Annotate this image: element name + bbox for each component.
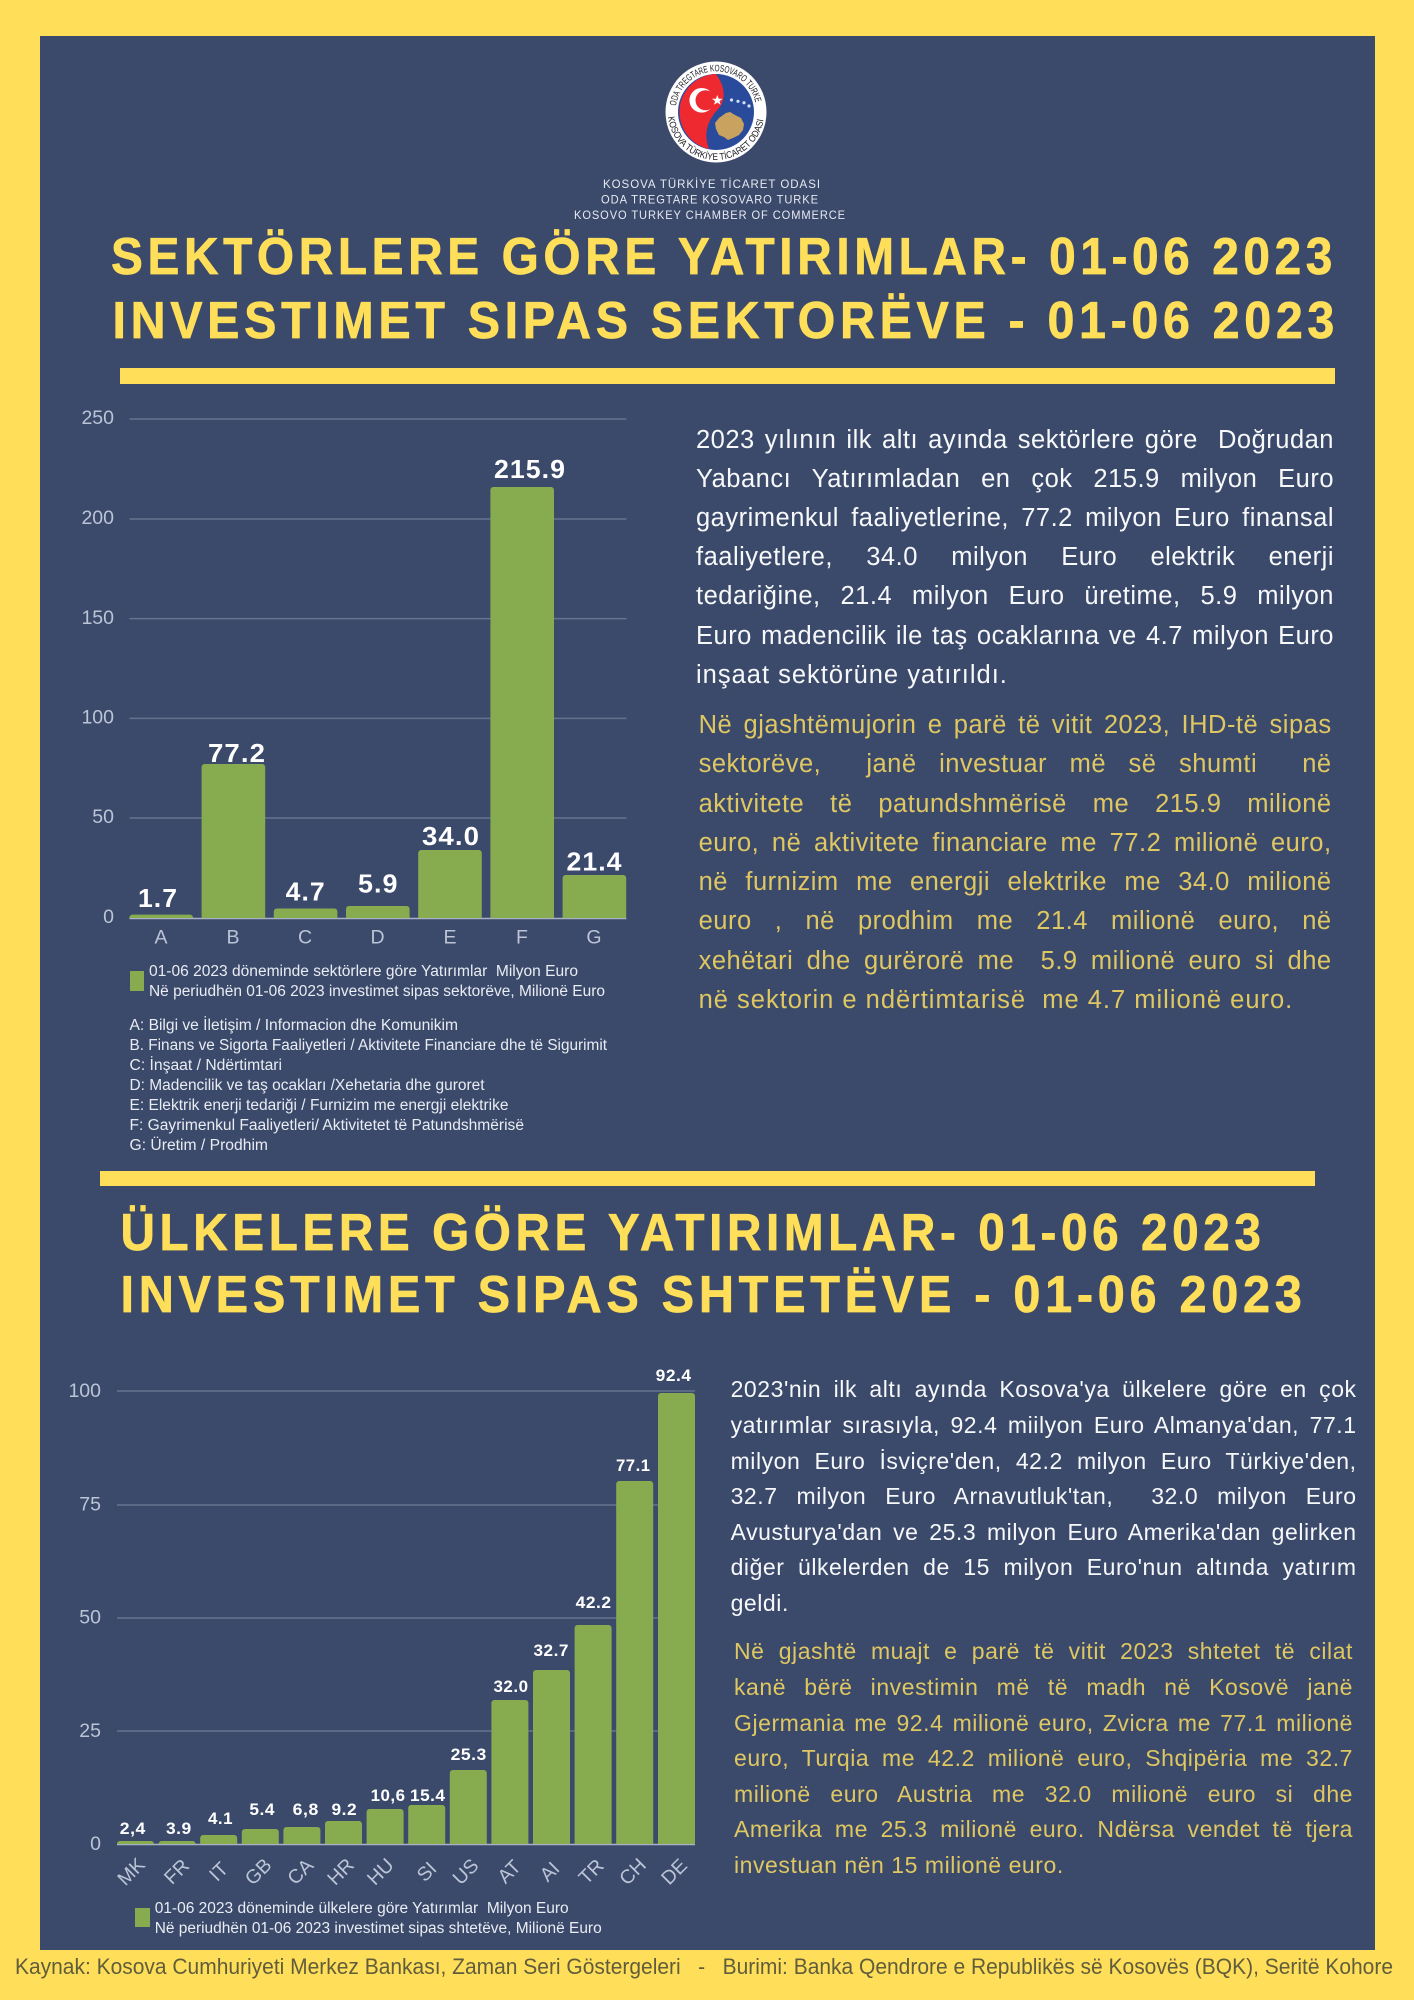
text block: sector analysis in Albanian: aktivitete të patundshmërisë me 215.9 milionë xyxy=(699,790,1332,818)
value labels: 21.4 xyxy=(566,847,622,877)
value labels: 215.9 xyxy=(494,454,566,484)
value labels: 42.2 xyxy=(576,1593,612,1612)
country labels rotated: CH xyxy=(615,1854,651,1890)
text block: country analysis in Albanian xyxy=(734,1638,1353,1878)
text block: country analysis in Turkish xyxy=(730,1376,1357,1616)
sector key list: F: Gayrimenkul Faaliyetleri/ Aktivitetet të Patundshmërisë xyxy=(130,1117,524,1134)
bars xyxy=(129,487,626,927)
value labels: 25.3 xyxy=(451,1745,487,1764)
title: investments by sector: SEKTÖRLERE GÖRE YATIRIMLAR- 01-06 2023 xyxy=(111,228,1337,286)
country labels rotated: US xyxy=(449,1855,483,1889)
y axis labels: 0 xyxy=(90,1833,101,1855)
legend: sector chart xyxy=(130,963,605,1000)
text block: sector analysis in Albanian: sektorëve, janë investuar më së shumti në xyxy=(699,750,1332,778)
sector key list: C: İnşaat / Ndërtimtari xyxy=(130,1056,282,1074)
value labels: 92.4 xyxy=(656,1366,692,1385)
category labels: B xyxy=(226,926,240,948)
country labels rotated: HU xyxy=(363,1854,398,1890)
value labels: 3.9 xyxy=(166,1819,192,1838)
text block: country analysis in Albanian: Në gjashtë muajt e parë të vitit 2023 shtetet të cilat xyxy=(734,1638,1353,1664)
country labels rotated: IT xyxy=(205,1858,233,1886)
sector key list: A: Bilgi ve İletişim / Informacion dhe Komunikim xyxy=(130,1016,458,1034)
y axis labels: 100 xyxy=(68,1380,101,1402)
value labels xyxy=(138,454,622,913)
country labels rotated: TR xyxy=(575,1855,609,1889)
value labels: 34.0 xyxy=(422,821,480,851)
bars xyxy=(117,1393,695,1853)
logo: chamber of commerce seal: KOSOVA TÜRKİYE TİCARET ODASI xyxy=(668,116,764,160)
organisation name in three languages: KOSOVO TURKEY CHAMBER OF COMMERCE xyxy=(574,208,846,222)
logo: chamber of commerce seal xyxy=(666,62,766,162)
text block: sector analysis in Albanian: xehëtari dhe gurërorë me 5.9 milionë euro si dhe xyxy=(699,947,1332,975)
y axis labels: 100 xyxy=(81,706,114,728)
y axis labels: 50 xyxy=(79,1606,101,1628)
text block: country analysis in Turkish: yatırımlar sırasıyla, 92.4 miilyon Euro Almanya'dan, 77.1 xyxy=(731,1412,1357,1438)
legend: sector chart: Në periudhën 01-06 2023 investimet sipas sektorëve, Milionë Euro xyxy=(149,983,605,1000)
title: investments by country: ÜLKELERE GÖRE YATIRIMLAR- 01-06 2023 xyxy=(120,1204,1266,1262)
organisation name in three languages xyxy=(574,177,846,222)
country labels rotated: GB xyxy=(241,1854,276,1890)
text block: country analysis in Albanian: milionë euro Austria me 32.0 milionë euro si dhe xyxy=(734,1781,1353,1807)
sector key list: G: Üretim / Prodhim xyxy=(130,1136,268,1154)
y axis labels: 150 xyxy=(81,607,114,629)
divider bar: middle section xyxy=(100,1171,1315,1186)
title: investments by country xyxy=(120,1204,1306,1324)
title: investments by sector xyxy=(111,228,1339,350)
y axis labels: 25 xyxy=(79,1720,101,1742)
text block: sector analysis in Albanian: në furnizim me energji elektrike me 34.0 milionë xyxy=(699,868,1332,896)
text block: sector analysis in Turkish: inşaat sektörüne yatırıldı. xyxy=(696,661,1008,689)
value labels: 6,8 xyxy=(293,1800,319,1819)
text block: sector analysis in Turkish: 2023 yılının ilk altı ayında sektörlere göre Doğrudan xyxy=(696,426,1334,454)
legend: sector chart: 01-06 2023 döneminde sektörlere göre Yatırımlar Milyon Euro xyxy=(149,963,578,980)
sector key list: B. Finans ve Sigorta Faaliyetleri / Aktivitete Financiare dhe të Sigurimit xyxy=(130,1037,608,1054)
text block: country analysis in Albanian: kanë bërë investimin më të madh në Kosovë janë xyxy=(734,1674,1353,1700)
text block: sector analysis in Turkish: Euro madencilik ile taş ocaklarına ve 4.7 milyon Euro xyxy=(696,622,1334,650)
value labels: 77.2 xyxy=(208,738,266,768)
text block: country analysis in Turkish: geldi. xyxy=(731,1590,789,1616)
value labels: 5.4 xyxy=(249,1800,275,1819)
country labels rotated: FR xyxy=(160,1855,194,1889)
value labels: 4.7 xyxy=(286,877,326,907)
sector key list: E: Elektrik enerji tedariği / Furnizim me energji elektrike xyxy=(130,1097,508,1114)
value labels: 15.4 xyxy=(410,1786,446,1805)
text block: country analysis in Turkish: Avusturya'dan ve 25.3 milyon Euro Amerika'dan gelirken xyxy=(731,1519,1357,1545)
y axis labels xyxy=(81,407,114,928)
bar chart: investments by country xyxy=(68,1366,695,1890)
text block: sector analysis in Albanian: euro , në prodhim me 21.4 milionë euro, në xyxy=(699,907,1332,935)
y axis labels: 50 xyxy=(92,806,114,828)
legend: country chart: Në periudhën 01-06 2023 investimet sipas shtetëve, Milionë Euro xyxy=(155,1920,602,1937)
value labels: 1.7 xyxy=(138,883,178,913)
text block: country analysis in Albanian: investuan nën 15 milionë euro. xyxy=(734,1852,1064,1878)
text block: sector analysis in Turkish: gayrimenkul faaliyetlerine, 77.2 milyon Euro finansal xyxy=(696,504,1334,532)
text block: sector analysis in Turkish: tedariğine, 21.4 milyon Euro üretime, 5.9 milyon xyxy=(696,582,1334,610)
divider bar: top section xyxy=(120,368,1335,384)
value labels: 5.9 xyxy=(358,869,398,899)
country labels rotated: AI xyxy=(536,1858,564,1886)
value labels: 10,6 xyxy=(371,1786,406,1805)
country labels rotated: CA xyxy=(283,1855,318,1889)
y axis labels: 200 xyxy=(81,507,114,529)
value labels: 32.7 xyxy=(534,1641,569,1660)
country labels rotated: DE xyxy=(657,1855,692,1889)
organisation name in three languages: KOSOVA TÜRKİYE TİCARET ODASI xyxy=(603,177,821,191)
bar chart: investments by sector xyxy=(81,407,626,948)
title: investments by country: INVESTIMET SIPAS SHTETËVE - 01-06 2023 xyxy=(120,1266,1306,1324)
country labels rotated: MK xyxy=(113,1854,150,1890)
country labels rotated: AT xyxy=(493,1856,526,1888)
title: investments by sector: INVESTIMET SIPAS SEKTORËVE - 01-06 2023 xyxy=(112,292,1339,350)
text block: country analysis in Turkish: milyon Euro İsviçre'den, 42.2 milyon Euro Türkiye'den, xyxy=(731,1448,1357,1474)
text block: country analysis in Turkish: 2023'nin ilk altı ayında Kosova'ya ülkelere göre en çok xyxy=(731,1376,1357,1402)
sector key list: D: Madencilik ve taş ocakları /Xehetaria dhe guroret xyxy=(130,1077,485,1094)
category labels: F xyxy=(516,926,528,948)
value labels: 9.2 xyxy=(332,1800,357,1819)
text block: sector analysis in Albanian: në sektorin e ndërtimtarisë me 4.7 milionë euro. xyxy=(699,986,1293,1014)
logo: chamber of commerce seal: ODA TREGTARE KOSOVARO TURKE xyxy=(670,64,762,106)
y axis labels: 0 xyxy=(103,906,114,928)
category labels: D xyxy=(370,926,385,948)
sector key list xyxy=(130,1016,608,1154)
country labels rotated xyxy=(113,1854,692,1890)
text block: country analysis in Turkish: diğer ülkelerden de 15 milyon Euro'nun altında yatırım xyxy=(731,1554,1357,1580)
country labels rotated: HR xyxy=(323,1854,359,1890)
text block: sector analysis in Turkish: faaliyetlere, 34.0 milyon Euro elektrik enerji xyxy=(696,543,1334,571)
value labels: 4.1 xyxy=(208,1809,233,1828)
text block: country analysis in Turkish: 32.7 milyon Euro Arnavutluk'tan, 32.0 milyon Euro xyxy=(731,1483,1357,1509)
category labels: C xyxy=(298,926,312,948)
category labels xyxy=(154,926,602,948)
category labels: A xyxy=(154,926,168,948)
y axis labels xyxy=(68,1380,101,1855)
value labels xyxy=(120,1366,692,1838)
value labels: 32.0 xyxy=(494,1677,528,1696)
organisation name in three languages: ODA TREGTARE KOSOVARO TURKE xyxy=(601,192,819,206)
legend: country chart xyxy=(135,1900,602,1937)
y axis labels: 75 xyxy=(79,1494,101,1516)
legend: country chart: 01-06 2023 döneminde ülkelere göre Yatırımlar Milyon Euro xyxy=(155,1900,569,1917)
country labels rotated: SI xyxy=(413,1858,441,1886)
text block: country analysis in Albanian: Amerika me 25.3 milionë euro. Ndërsa vendet të tjera xyxy=(734,1816,1353,1842)
text block: sector analysis in Turkish xyxy=(696,426,1334,689)
category labels: G xyxy=(586,926,602,948)
category labels: E xyxy=(443,926,457,948)
text block: sector analysis in Albanian: euro, në aktivitete financiare me 77.2 milionë euro, xyxy=(699,829,1332,857)
value labels: 2,4 xyxy=(120,1819,146,1838)
value labels: 77.1 xyxy=(616,1456,650,1475)
text block: country analysis in Albanian: euro, Turqia me 42.2 milionë euro, Shqipëria me 32.7 xyxy=(734,1745,1353,1771)
text block: sector analysis in Albanian: Në gjashtëmujorin e parë të vitit 2023, IHD-të sipas xyxy=(699,711,1332,739)
text block: sector analysis in Albanian xyxy=(699,711,1332,1014)
text block: country analysis in Albanian: Gjermania me 92.4 milionë euro, Zvicra me 77.1 milionë xyxy=(734,1710,1353,1736)
y axis labels: 250 xyxy=(81,407,114,429)
text block: sector analysis in Turkish: Yabancı Yatırımladan en çok 215.9 milyon Euro xyxy=(696,465,1334,493)
